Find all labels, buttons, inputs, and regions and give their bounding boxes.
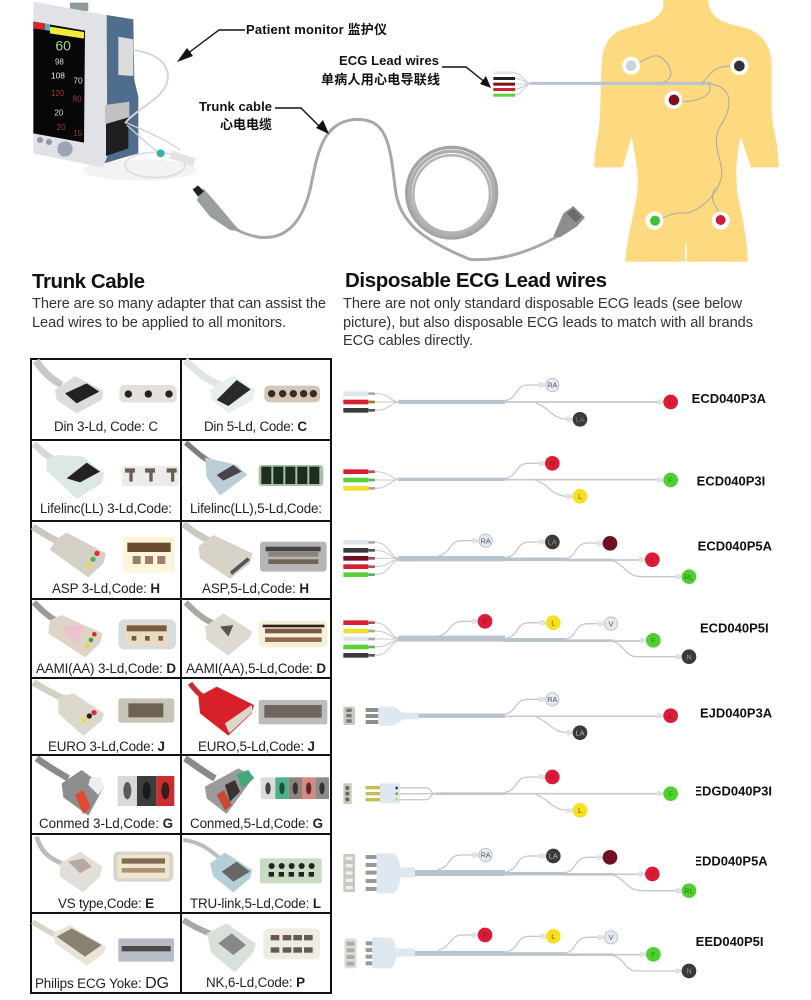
torso <box>594 0 779 262</box>
illustration: patient monitor: 60 <box>55 38 71 54</box>
lead set EJD040P3A: RA <box>547 695 558 704</box>
lead set EDD040P5A: L <box>650 870 654 879</box>
cell captions: AAMI(AA),5-Ld,Code: D <box>186 661 326 676</box>
illustration: patient monitor: 70 <box>73 75 83 85</box>
lead set EED040P5I: R <box>482 931 488 940</box>
heading: trunk cable: Trunk Cable <box>32 270 145 293</box>
lead set ECD040P5I: V <box>609 619 614 628</box>
lead set ECD040P3A <box>343 378 767 427</box>
cell captions: AAMI(AA) 3-Ld,Code: D <box>36 661 176 676</box>
cell captions: NK,6-Ld,Code: P <box>206 975 305 990</box>
cell captions: TRU-link,5-Ld,Code: L <box>190 896 321 911</box>
panel: lead wire rows five to eight <box>343 693 773 978</box>
lead set EJD040P3A: LA <box>576 728 585 737</box>
lead set EDGD040P3I: R <box>550 773 555 782</box>
lead set EDGD040P3I: F <box>668 789 673 798</box>
lead set ECD040P3I: R <box>550 459 555 468</box>
cell captions: Conmed 3-Ld,Code: G <box>39 816 173 831</box>
label: trunk cable with arrow: 心电电缆 <box>220 117 272 132</box>
cell captions: EURO,5-Ld,Code: J <box>198 739 315 754</box>
illustration: patient monitor: 98 <box>55 57 64 66</box>
illustration: patient monitor: 15 <box>73 129 83 138</box>
label: ECG lead wires with arrow: ECG Lead wires <box>339 53 439 68</box>
lead set EDD040P5A: EDD040P5A <box>693 853 768 868</box>
lead set ECD040P5A: RA <box>481 536 491 545</box>
label: trunk cable with arrow: Trunk cable <box>199 99 272 114</box>
lead set ECD040P5I <box>343 614 769 664</box>
cell captions: Din 5-Ld, Code: C <box>204 419 307 434</box>
AAMI 5-Ld <box>186 602 327 656</box>
electrode LA <box>730 57 748 75</box>
Conmed 3-Ld <box>37 758 174 816</box>
cell captions: Conmed,5-Ld,Code: G <box>190 816 323 831</box>
lead plugs <box>493 71 531 97</box>
lead set EED040P5I: EED040P5I <box>696 934 764 949</box>
electrode RA <box>622 57 640 75</box>
label: ECG lead wires with arrow <box>321 53 491 88</box>
lead set ECD040P5I: R <box>482 617 488 626</box>
text: trunk cable description: Lead wires to be applied to all monitors. <box>32 315 286 331</box>
lead set EJD040P3A <box>343 693 773 740</box>
lead set EDD040P5A: RL <box>684 886 694 895</box>
panel: lead wire rows one to four <box>343 378 773 664</box>
table grid <box>31 359 331 993</box>
TRU-link 5-Ld <box>183 840 322 892</box>
cell captions <box>35 419 326 992</box>
cell captions: Lifelinc(LL),5-Ld,Code: <box>190 501 322 516</box>
text: disposable leads description: ECG cables directly. <box>343 333 473 349</box>
EURO 5-Ld <box>190 683 327 736</box>
electrode green <box>645 212 663 230</box>
cell captions: EURO 3-Ld,Code: J <box>48 739 165 754</box>
label: patient monitor with arrow: Patient monitor 监护仪 <box>246 22 387 37</box>
illustration: trunk cable <box>193 119 585 260</box>
cell captions: Lifelinc(LL) 3-Ld,Code: <box>40 501 172 516</box>
cell captions: Din 3-Ld, Code: C <box>54 419 158 434</box>
lead set ECD040P3A: RA <box>547 381 558 390</box>
thumbnails: rows five to eight <box>33 682 329 972</box>
lead set ECD040P5A: ECD040P5A <box>698 539 773 554</box>
lead set EED040P5I: V <box>609 933 614 942</box>
lead set ECD040P3I: F <box>668 476 673 485</box>
cell captions: VS type,Code: E <box>58 896 154 911</box>
thumbnails: rows one to four <box>33 361 327 657</box>
lead set ECD040P3A: L <box>669 398 673 407</box>
lead set EED040P5I: F <box>651 950 656 959</box>
Conmed 5-Ld <box>185 758 329 814</box>
ASP 3-Ld <box>33 527 175 577</box>
illustration: patient monitor: 20 <box>54 108 64 117</box>
Din 3-Ld <box>36 361 177 413</box>
lead set EDGD040P3I <box>343 770 772 818</box>
lead set ECD040P3A: ECD040P3A <box>692 391 767 406</box>
label: patient monitor with arrow <box>177 22 387 62</box>
AAMI 3-Ld <box>34 602 176 657</box>
VS type <box>37 837 173 892</box>
lead set EDD040P5A: RA <box>481 851 491 860</box>
lead set ECD040P5I: ECD040P5I <box>700 621 769 636</box>
heading: disposable ECG lead wires: Disposable ECG Lead wires <box>345 269 607 292</box>
label: ECG lead wires with arrow: 单病人用心电导联线 <box>321 72 440 87</box>
ASP 5-Ld <box>183 524 327 579</box>
lead set ECD040P5A: LA <box>548 538 557 547</box>
cell captions: ASP,5-Ld,Code: H <box>202 581 309 596</box>
lead set ECD040P3I: L <box>578 492 582 501</box>
lead set EDGD040P3I: L <box>578 806 582 815</box>
illustration: patient monitor <box>33 2 197 181</box>
lead set ECD040P3A: LA <box>576 415 585 424</box>
Philips ECG Yoke <box>33 922 174 966</box>
Lifelinc 5-Ld <box>186 443 323 496</box>
lead set ECD040P3I <box>343 456 765 504</box>
Lifelinc 3-Ld <box>34 444 179 499</box>
lead set ECD040P5I: F <box>651 636 656 645</box>
text: disposable leads description: picture), but also disposable ECG leads to match with all brands <box>343 315 753 331</box>
lead set ECD040P5A: L <box>650 555 654 564</box>
lead set EED040P5I: N <box>686 967 692 976</box>
label: trunk cable with arrow <box>199 99 329 134</box>
electrode red <box>712 212 730 230</box>
lead set ECD040P5A <box>343 534 773 584</box>
cell captions: Philips ECG Yoke: DG <box>35 975 169 992</box>
lead set EJD040P3A: L <box>669 711 673 720</box>
cell captions: ASP 3-Ld,Code: H <box>52 581 160 596</box>
lead set EED040P5I: L <box>551 932 555 941</box>
panel: connector table <box>31 359 331 993</box>
lead wires on the body <box>531 56 730 218</box>
lead set ECD040P5I: L <box>551 618 555 627</box>
lead set EDGD040P3I: EDGD040P3I <box>693 784 772 799</box>
illustration: patient monitor: 120 <box>51 89 65 98</box>
illustration: torso with electrodes and lead wires <box>493 0 779 262</box>
text: disposable leads description: There are not only standard disposable ECG leads (see below <box>343 296 742 312</box>
lead set ECD040P5I: N <box>686 652 692 661</box>
illustration: patient monitor: 20 <box>57 123 66 132</box>
electrode maroon <box>664 91 682 109</box>
lead set ECD040P5A: RL <box>684 572 694 581</box>
lead set EDD040P5A: LA <box>549 852 558 861</box>
illustration: patient monitor: 80 <box>73 95 82 104</box>
lead set EED040P5I <box>344 928 764 978</box>
illustration: patient monitor: 108 <box>51 70 65 80</box>
lead set EJD040P3A: EJD040P3A <box>700 706 773 721</box>
lead set ECD040P3I: ECD040P3I <box>697 473 765 488</box>
NK 6-Ld <box>183 920 320 972</box>
lead set EDD040P5A <box>343 848 768 898</box>
text: trunk cable description: There are so many adapter that can assist the <box>32 296 326 312</box>
EURO 3-Ld <box>33 682 174 736</box>
Din 5-Ld <box>185 361 320 413</box>
